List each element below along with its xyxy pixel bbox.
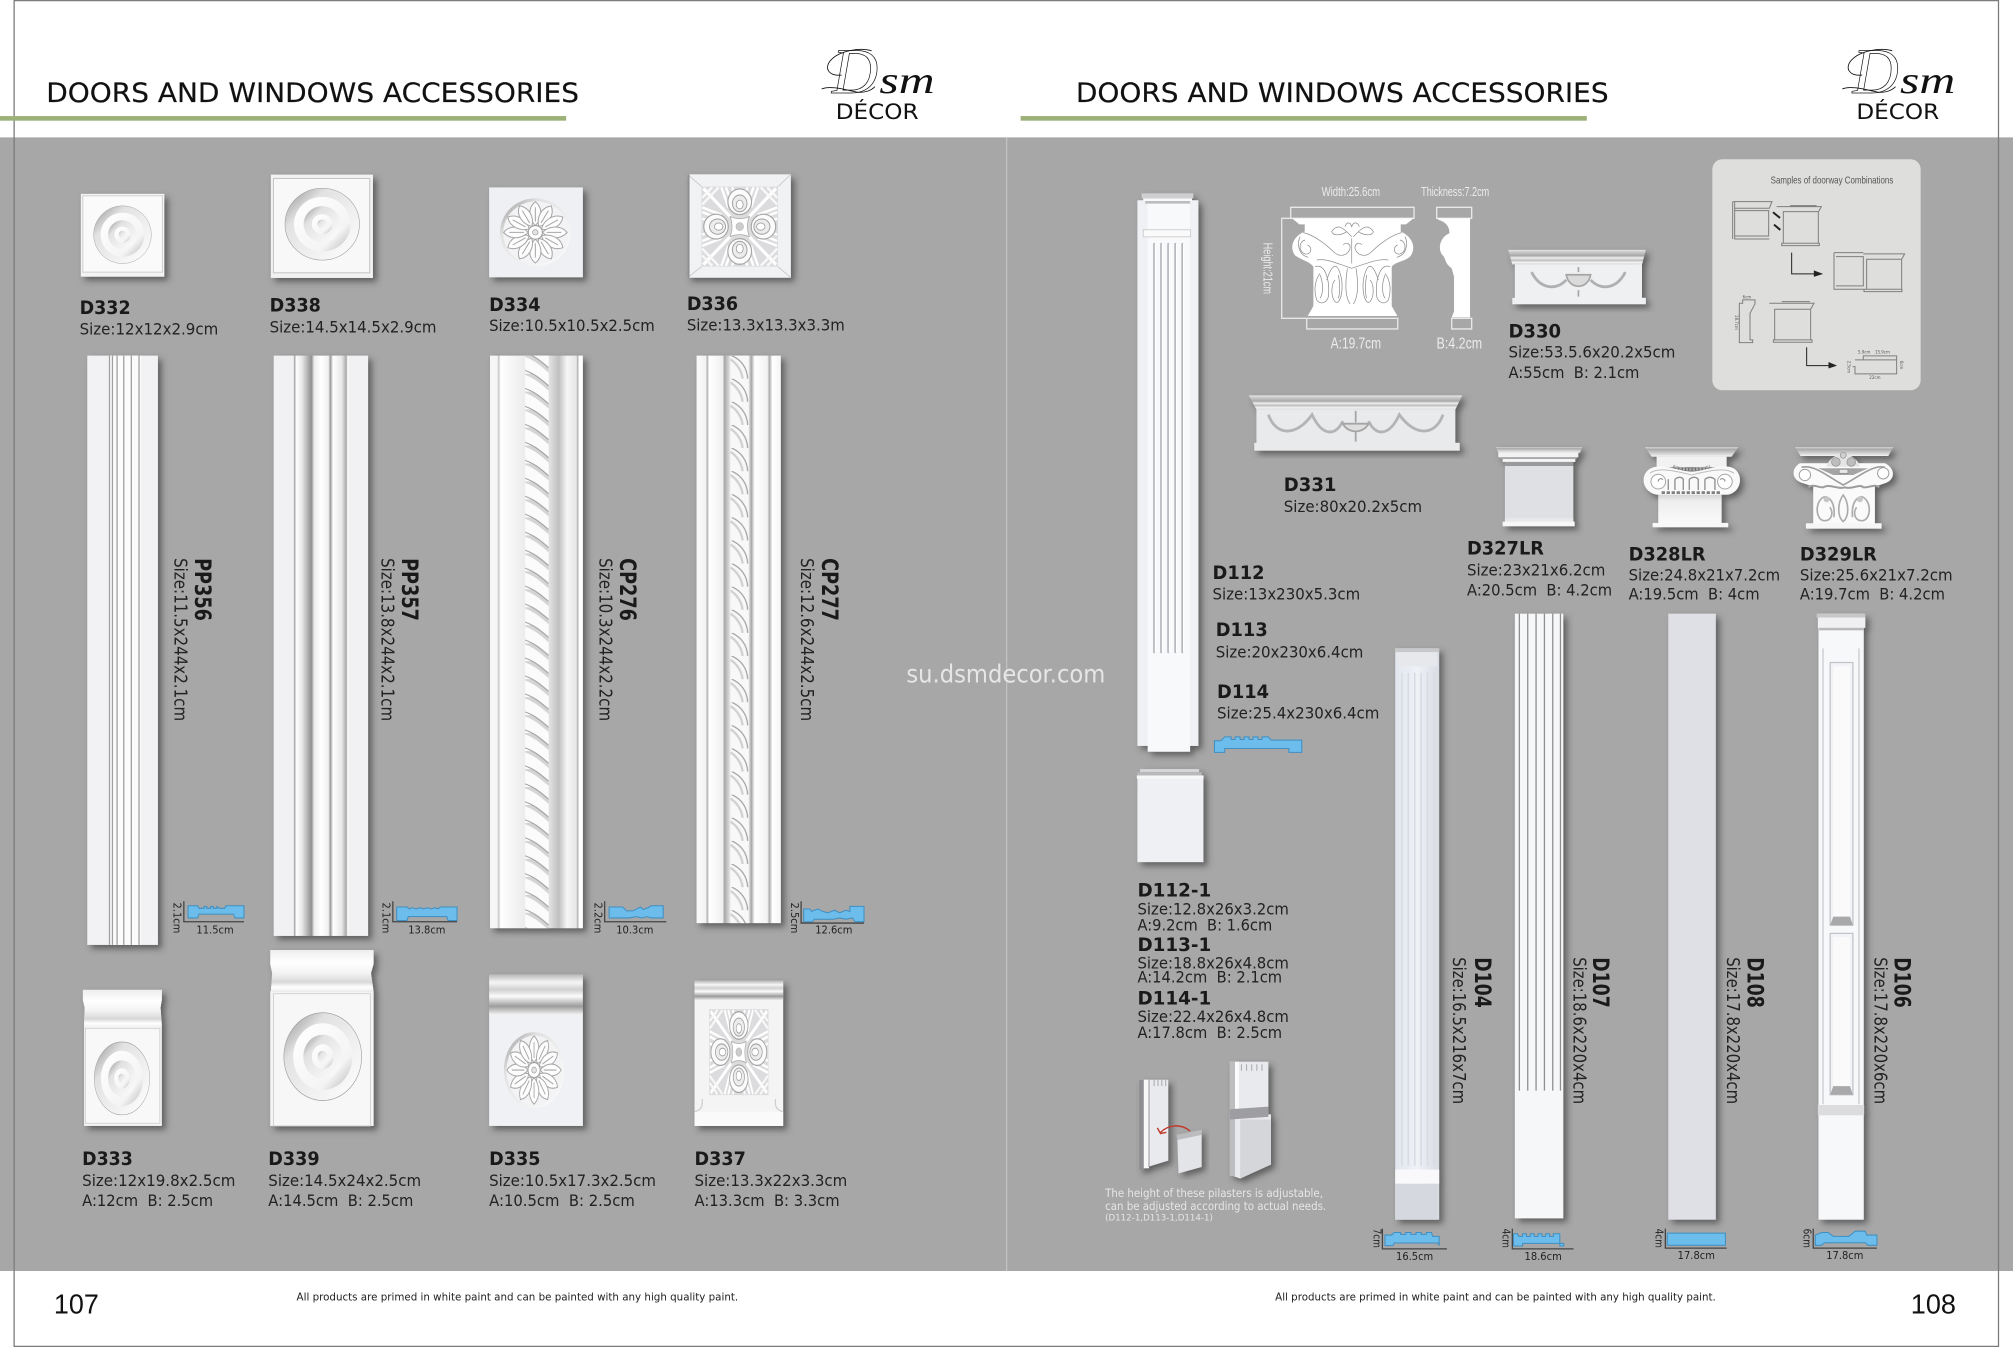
dimension labels: Width:25.6cm xyxy=(1322,184,1380,199)
note: can be adjusted according to actual needs. xyxy=(1105,1199,1326,1213)
profile: 2.2cm xyxy=(591,903,604,933)
item: D108 xyxy=(1653,614,1767,1262)
label: D106 xyxy=(1889,957,1915,1008)
label: D333 xyxy=(82,1149,133,1170)
note: (D112-1,D113-1,D114-1) xyxy=(1105,1214,1213,1224)
profile: 13.8cm xyxy=(408,923,445,936)
label: PP356 xyxy=(189,558,215,621)
A and B: A:55cm B: 2.1cm xyxy=(1508,363,1639,382)
label: CP276 xyxy=(614,558,640,621)
label: D336 xyxy=(687,294,738,315)
profile xyxy=(1500,1229,1574,1263)
right page header xyxy=(1021,36,1955,124)
item: D112 pilaster with D113 and D114 xyxy=(1137,193,1379,752)
item: D337 xyxy=(695,981,847,1210)
capital dimension drawing xyxy=(1260,184,1489,353)
title: DOORS AND WINDOWS ACCESSORIES xyxy=(1076,78,1609,109)
size: Size:13.3x22x3.3cm xyxy=(695,1171,847,1190)
size: Size:24.8x21x7.2cm xyxy=(1629,565,1780,584)
product: D328LR ionic capital xyxy=(1644,447,1740,527)
logo xyxy=(822,36,935,124)
A and B: A:20.5cm B: 4.2cm xyxy=(1467,581,1612,600)
size: Size:10.5x10.5x2.5cm xyxy=(489,316,655,335)
size: Size:12.6x244x2.5cm xyxy=(796,558,817,721)
label: D339 xyxy=(268,1149,320,1170)
logo: DÉCOR xyxy=(1856,99,1939,124)
size: Size:80x20.2x5cm xyxy=(1284,497,1422,516)
item: D334 xyxy=(489,187,655,335)
panel title: Samples of doorway Combinations xyxy=(1771,175,1893,186)
arrows xyxy=(1773,212,1837,368)
item: D107 xyxy=(1500,614,1613,1263)
right page footer xyxy=(1275,1288,1956,1319)
profile xyxy=(380,901,457,936)
label: D337 xyxy=(695,1149,746,1170)
footnote: All products are primed in white paint and can be painted with any high quality paint. xyxy=(1275,1291,1716,1304)
logo: D xyxy=(1852,36,1899,107)
size: Size:14.5x14.5x2.9cm xyxy=(270,317,436,336)
note: The height of these pilasters is adjustable, xyxy=(1104,1186,1323,1200)
label: D329LR xyxy=(1800,545,1877,566)
size: Size:12x19.8x2.5cm xyxy=(82,1171,235,1190)
size: Size:13.8x244x2.1cm xyxy=(376,558,397,721)
item: D328LR xyxy=(1629,447,1780,604)
profile: 11.5cm xyxy=(196,923,234,936)
dimension labels: Thickness:7.2cm xyxy=(1421,184,1489,199)
logo xyxy=(1842,36,1955,124)
size: Size:12x12x2.9cm xyxy=(80,319,218,338)
assembled pilaster xyxy=(1230,1062,1271,1179)
profile xyxy=(1801,1229,1877,1262)
item: D335 xyxy=(489,974,656,1210)
product: D335 floral plinth xyxy=(489,974,583,1126)
label: D112: D112 xyxy=(1213,563,1265,584)
label: D328LR xyxy=(1629,545,1706,566)
profile: D114 xyxy=(1214,737,1302,752)
left page header xyxy=(0,36,935,124)
size: Size:10.3x244x2.2cm xyxy=(594,558,615,721)
size: Size:25.6x21x7.2cm xyxy=(1800,565,1953,584)
product: D104 pilaster xyxy=(1395,648,1439,1220)
profile: 16.5cm xyxy=(1396,1250,1433,1263)
combination diagrams xyxy=(1733,202,1905,374)
label: D113: D113 xyxy=(1216,620,1268,641)
size: Size:14.5x24x2.5cm xyxy=(268,1171,421,1190)
item: D104 xyxy=(1370,648,1495,1263)
product: D108 plain pilaster xyxy=(1668,614,1716,1220)
dimension labels: 15.9cm xyxy=(1875,350,1890,355)
profile: 2.1cm xyxy=(170,903,183,933)
size: D113-1: Size:18.8x26x4.8cm xyxy=(1137,953,1289,972)
green rule xyxy=(0,116,566,121)
dimension labels: 18.7cm xyxy=(1734,315,1739,330)
size: Size:13.3x13.3x3.3m xyxy=(687,316,845,335)
profile: 6cm xyxy=(1801,1229,1814,1248)
size: Size:17.8x220x4cm xyxy=(1722,957,1743,1104)
profile xyxy=(170,901,244,936)
profile xyxy=(788,901,864,936)
product: CP276 rope strip xyxy=(490,356,583,928)
size: D114: Size:25.4x230x6.4cm xyxy=(1217,704,1379,723)
product: CP277 rope strip xyxy=(697,356,781,923)
size: Size:53.5.6x20.2x5cm xyxy=(1508,343,1675,362)
item: D112-1 base block group xyxy=(1137,769,1289,1042)
adjustable pilaster illustration xyxy=(1104,1062,1326,1224)
label: D108 xyxy=(1741,957,1767,1008)
dimension labels: 22cm xyxy=(1869,375,1881,380)
item: CP277 xyxy=(697,356,864,936)
profile: 17.8cm xyxy=(1826,1249,1863,1262)
dimension labels: B:4.2cm xyxy=(1437,336,1482,353)
size: Size:23x21x6.2cm xyxy=(1467,561,1605,580)
watermark: su.dsmdecor.com xyxy=(906,660,1105,689)
product: D332 rosette block xyxy=(81,194,164,277)
A and B: D114-1: A:17.8cm B: 2.5cm xyxy=(1137,1023,1282,1042)
profile: 4cm xyxy=(1500,1229,1513,1248)
size: Size:16.5x216x7cm xyxy=(1448,957,1469,1104)
logo: D xyxy=(831,36,878,107)
base piece xyxy=(1177,1130,1202,1173)
footnote: All products are primed in white paint and can be painted with any high quality paint. xyxy=(297,1291,738,1304)
logo: sm xyxy=(879,60,935,102)
size: Size:10.5x17.3x2.5cm xyxy=(489,1171,656,1190)
label: D331 xyxy=(1284,475,1336,496)
samples panel xyxy=(1712,159,1921,390)
logo: sm xyxy=(1900,60,1955,102)
product: D112 fluted pilaster xyxy=(1137,193,1198,752)
product: D107 fluted pilaster xyxy=(1515,614,1563,1218)
profile: 7cm xyxy=(1370,1229,1383,1248)
label: D104 xyxy=(1469,957,1495,1008)
product: D330 pediment xyxy=(1508,250,1646,304)
dimension labels: Height:21cm xyxy=(1260,243,1275,294)
product: D331 pediment xyxy=(1249,395,1462,451)
title: DOORS AND WINDOWS ACCESSORIES xyxy=(46,78,579,109)
label: D107 xyxy=(1587,957,1613,1008)
label: D332 xyxy=(80,298,131,319)
A and B: A:14.5cm B: 2.5cm xyxy=(268,1191,413,1210)
pilaster cut piece xyxy=(1139,1080,1168,1170)
page number: 108 xyxy=(1911,1288,1956,1319)
product: PP356 strip xyxy=(87,356,158,945)
capital front view xyxy=(1282,207,1414,329)
label: D114: D114 xyxy=(1217,682,1269,703)
product: D339 plinth block xyxy=(270,950,374,1126)
profile xyxy=(1653,1229,1727,1262)
item: CP276 xyxy=(490,356,666,936)
product: base block xyxy=(1137,769,1204,862)
size: D113: Size:20x230x6.4cm xyxy=(1216,642,1363,661)
A and B: A:19.7cm B: 4.2cm xyxy=(1800,585,1945,604)
dimension labels: 6cm xyxy=(1743,295,1751,300)
left page footer xyxy=(54,1288,738,1319)
A and B: A:13.3cm B: 3.3cm xyxy=(695,1191,840,1210)
logo: DÉCOR xyxy=(836,99,919,124)
green rule xyxy=(1021,116,1587,121)
item: PP357 xyxy=(274,356,457,936)
dimension labels: 5.9cm xyxy=(1858,350,1871,355)
profile xyxy=(1370,1229,1447,1263)
profile: 10.3cm xyxy=(616,923,653,936)
item: D329LR xyxy=(1794,447,1953,604)
size: D114-1: Size:22.4x26x4.8cm xyxy=(1137,1007,1289,1026)
label: CP277 xyxy=(816,558,842,621)
profile: 4cm xyxy=(1653,1229,1666,1248)
dimension labels: 2.5cm xyxy=(1846,361,1851,373)
label: D330 xyxy=(1508,322,1561,343)
label: PP357 xyxy=(396,558,422,621)
product: D327LR capital xyxy=(1496,447,1582,526)
label: D335 xyxy=(489,1149,540,1170)
profile: 2.1cm xyxy=(380,903,393,933)
arrow xyxy=(1157,1126,1190,1134)
product: D329LR corinthian capital xyxy=(1794,447,1893,529)
product: D337 acanthus plinth xyxy=(695,981,783,1126)
product: D334 floral block xyxy=(489,187,583,277)
dimension labels: A:19.7cm xyxy=(1331,336,1381,353)
A and B: A:12cm B: 2.5cm xyxy=(82,1191,213,1210)
page number: 107 xyxy=(54,1288,99,1319)
A and B: A:10.5cm B: 2.5cm xyxy=(489,1191,635,1210)
item: D330 xyxy=(1508,250,1675,382)
size: D112-1: Size:12.8x26x3.2cm xyxy=(1137,900,1289,919)
item: D331 xyxy=(1249,395,1462,516)
product: D333 plinth block xyxy=(83,990,162,1126)
item: D327LR xyxy=(1467,447,1612,600)
item: D338 xyxy=(270,175,436,336)
dimension labels: 6cm xyxy=(1899,361,1904,369)
dimension labels xyxy=(1734,295,1904,380)
A and B: D113-1: A:14.2cm B: 2.1cm xyxy=(1137,968,1282,987)
profile: 2.5cm xyxy=(788,903,801,933)
product: D336 acanthus block xyxy=(687,174,791,278)
item: D339 xyxy=(268,950,421,1210)
size: D112: Size:13x230x5.3cm xyxy=(1213,585,1360,604)
label: D334 xyxy=(489,295,540,316)
A and B: A:19.5cm B: 4cm xyxy=(1629,585,1760,604)
size: Size:17.8x220x6cm xyxy=(1869,957,1890,1104)
profile: 17.8cm xyxy=(1678,1249,1715,1262)
profile xyxy=(591,901,666,936)
size: Size:18.6x220x4cm xyxy=(1568,957,1589,1104)
profile: 12.6cm xyxy=(815,923,852,936)
label: D112-1: D112-1 xyxy=(1137,881,1211,902)
item: D333 xyxy=(82,990,235,1210)
item: D336 xyxy=(687,174,845,335)
product: PP357 strip xyxy=(274,356,368,936)
profile: 18.6cm xyxy=(1525,1250,1562,1263)
dimension labels xyxy=(1260,184,1489,353)
note xyxy=(1104,1186,1326,1224)
item: PP356 xyxy=(87,356,244,945)
size: Size:11.5x244x2.1cm xyxy=(169,558,190,721)
label: D113-1: D113-1 xyxy=(1137,935,1211,956)
item: D106 xyxy=(1801,614,1915,1262)
capital side profile xyxy=(1437,207,1472,329)
label: D338 xyxy=(270,296,321,317)
A and B: D112-1: A:9.2cm B: 1.6cm xyxy=(1137,916,1272,935)
item: D332 xyxy=(80,194,218,338)
product: D106 panelled pilaster xyxy=(1817,614,1865,1220)
label: D327LR xyxy=(1467,539,1544,560)
panel background xyxy=(1712,159,1921,390)
product: D338 rosette block xyxy=(271,175,373,278)
label: D114-1: D114-1 xyxy=(1137,988,1211,1009)
